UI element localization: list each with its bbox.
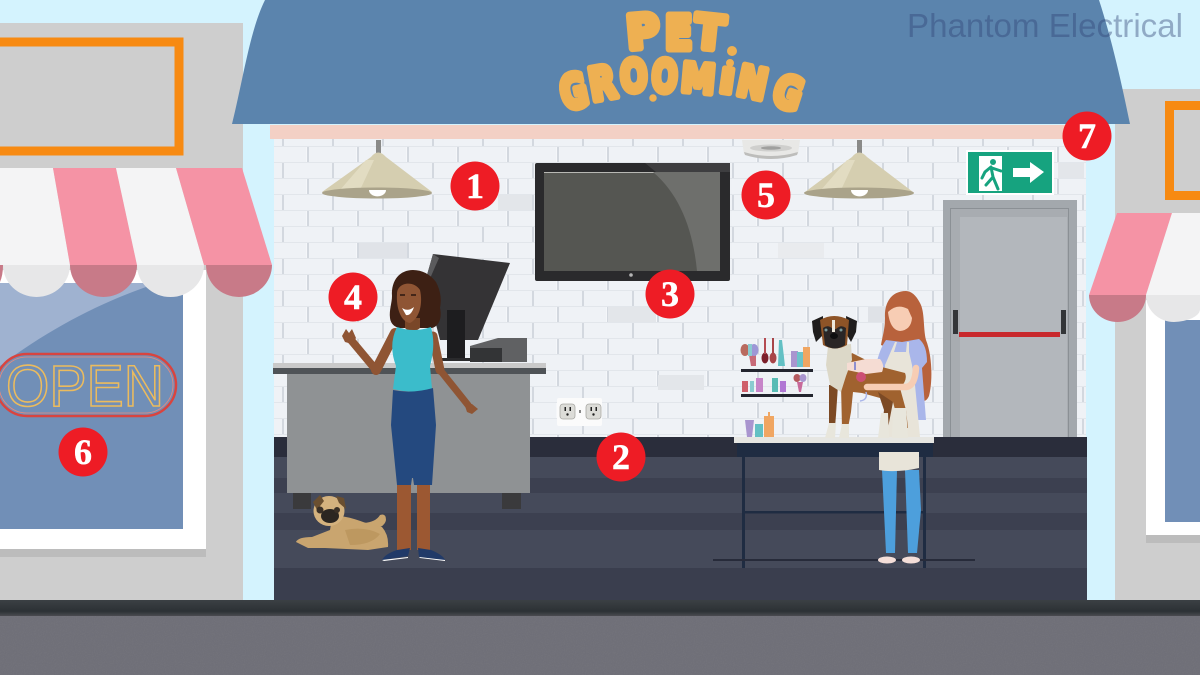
title: pet grooming logo: E (665, 7, 692, 61)
pug head (314, 496, 344, 526)
title: pet grooming logo: O (619, 51, 649, 103)
right shop window (1146, 300, 1200, 543)
callout number 6: 6 (74, 432, 92, 472)
groomer face (888, 307, 912, 331)
dog body (838, 353, 908, 428)
callout number 4 (328, 272, 378, 322)
right shop striped awning (1089, 213, 1200, 322)
callout number 2: 2 (612, 437, 630, 477)
title: pet grooming logo (555, 4, 809, 122)
dual wall power outlet (557, 398, 602, 426)
dog dark rear thigh (878, 392, 893, 428)
panel: left neighbouring shop (0, 23, 272, 600)
peach fascia band (270, 125, 1086, 139)
title: pet grooming logo: P (624, 4, 662, 60)
grooming table (713, 437, 975, 568)
reception counter (273, 363, 546, 509)
bottles on table (745, 412, 774, 437)
icon: right ceiling lamp (804, 140, 914, 198)
receptionist woman (342, 270, 478, 561)
road (0, 600, 1200, 675)
neon open sign: OPEN (6, 354, 164, 419)
pet hair dryer (847, 359, 883, 401)
left shop striped awning (0, 168, 272, 297)
receipt printer (470, 338, 527, 362)
callout number 7 (1062, 112, 1112, 160)
title: pet grooming logo: I (717, 61, 737, 102)
upper shelf with brushes and bottles (740, 338, 813, 372)
callout number 6 (58, 428, 108, 476)
dog head (812, 316, 857, 348)
receptionist navy trousers (391, 388, 436, 485)
pug tail (364, 515, 386, 529)
title: pet grooming logo: G (767, 65, 809, 122)
title: pet grooming logo: T (692, 4, 728, 61)
groomer legs (882, 470, 921, 553)
left shop sign frame (0, 42, 179, 151)
wall mounted television (535, 163, 730, 281)
left shop window (0, 270, 206, 557)
callout number 4: 4 (344, 277, 362, 317)
pug dog lying down (296, 495, 388, 550)
groomer shoes (878, 556, 896, 564)
callout number 2 (596, 432, 646, 482)
icon: left ceiling lamp (322, 140, 432, 198)
panic bar (953, 310, 1066, 337)
receptionist arms (351, 333, 468, 405)
watermark: Phantom Electrical: Phantom Electrical (907, 7, 1183, 44)
dog cream chest (826, 344, 852, 392)
title: pet grooming logo: N (733, 57, 772, 111)
roof canopy (232, 0, 1130, 124)
callout number 5 (742, 170, 790, 220)
computer monitor (425, 254, 510, 361)
icon: green emergency exit sign (966, 150, 1054, 195)
title: pet grooming logo: R (585, 57, 620, 112)
product shelves (740, 338, 813, 437)
receptionist neck and face (405, 318, 420, 332)
right shop sign frame (1170, 106, 1200, 196)
receptionist teal top (392, 327, 433, 392)
panel: shop interior wall (274, 139, 1086, 437)
boxer dog on table (812, 316, 916, 438)
panel: striped floor (274, 437, 1087, 600)
groomer hair (881, 291, 931, 401)
icon: smoke detector (742, 140, 800, 159)
receptionist legs and shoes (382, 484, 445, 561)
callout number 5: 5 (757, 175, 775, 215)
groomer blue shirt (876, 339, 927, 420)
title: pet grooming logo: O (650, 50, 679, 103)
callout number 7: 7 (1078, 116, 1096, 156)
receptionist hands (342, 329, 356, 344)
dog paws and socks (825, 408, 908, 438)
callout number 3: 3 (661, 274, 679, 314)
callout number 1: 1 (466, 166, 484, 206)
groomer arm (867, 368, 916, 387)
receptionist hair (390, 270, 441, 328)
emergency exit door with panic bar (943, 200, 1077, 437)
callout number 1 (450, 162, 500, 210)
groomer apron (885, 342, 920, 437)
dog far front leg (829, 385, 838, 427)
lower shelf with bottles (741, 374, 813, 397)
pug body (296, 516, 388, 550)
title: pet grooming logo: M (679, 54, 717, 104)
groomer woman (876, 291, 931, 564)
title: pet grooming logo: G (555, 64, 593, 121)
callout number 3 (646, 270, 694, 318)
panel: right neighbouring shop (1089, 89, 1200, 600)
